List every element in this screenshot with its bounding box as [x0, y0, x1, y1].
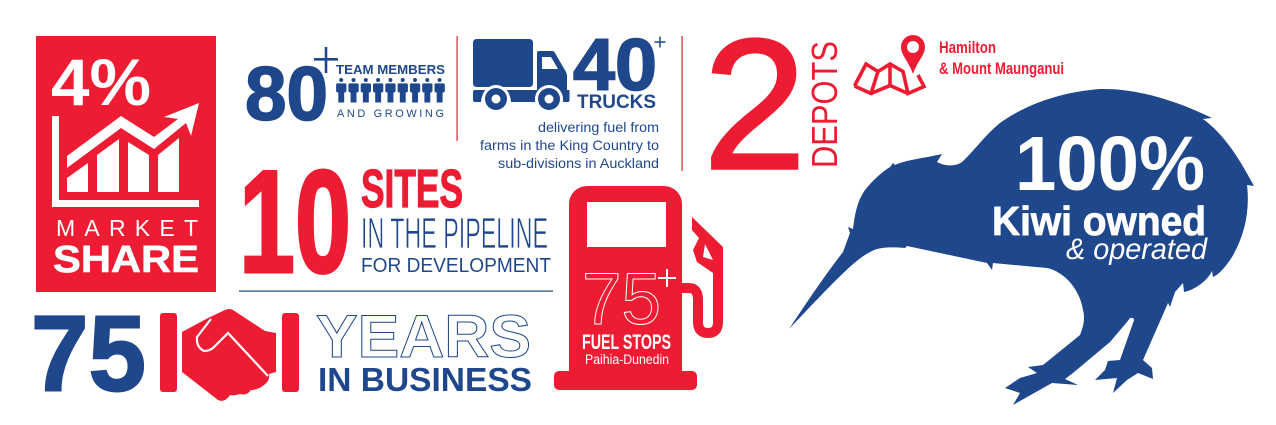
trucks description: sub-divisions in Auckland: [498, 155, 659, 171]
team members label: TEAM MEMBERS: [336, 63, 445, 77]
depot locations: [939, 38, 1064, 78]
depot locations: & Mount Maunganui: [939, 59, 1064, 78]
panel: years in business: [31, 292, 532, 414]
plus sign: [654, 36, 666, 48]
trucks label: TRUCKS: [577, 92, 656, 113]
depot locations: Hamilton: [939, 38, 996, 57]
trucks description: farms in the King Country to: [480, 137, 659, 153]
depot count: 2: [703, 2, 806, 208]
icon: map and pin: [854, 35, 925, 94]
panel: fuel stops: [554, 186, 723, 390]
icon: rising bar chart: [52, 103, 199, 207]
in the pipeline label: IN THE PIPELINE: [361, 209, 548, 258]
truck count: 40: [573, 25, 657, 106]
for development label: FOR DEVELOPMENT: [361, 255, 551, 277]
share label: SHARE: [53, 239, 199, 281]
market label: MARKET: [56, 215, 198, 241]
trucks description: delivering fuel from: [538, 119, 659, 135]
panel: sites in the pipeline: [239, 140, 551, 303]
plus sign: [658, 269, 676, 287]
and growing label: AND GROWING: [337, 108, 444, 120]
panel: kiwi owned: [789, 89, 1254, 405]
kiwi owned label: Kiwi owned: [992, 198, 1206, 244]
sites count: 10: [239, 140, 351, 303]
icon: row of people: [336, 78, 445, 103]
panel: trucks: [473, 25, 666, 171]
panel: depots: [703, 2, 1064, 208]
sites label: SITES: [361, 159, 463, 219]
depots label: DEPOTS: [804, 41, 845, 168]
plus sign: [314, 47, 338, 73]
panel: team members: [245, 47, 445, 137]
panel: market share: [36, 36, 216, 292]
trucks description: [480, 119, 659, 171]
fuel stops count: 75: [582, 259, 661, 340]
icon: handshake: [160, 309, 299, 401]
100 percent figure: 100%: [1015, 121, 1205, 207]
operated label: & operated: [1066, 233, 1208, 266]
years count: 75: [31, 292, 146, 414]
market share figure: 4%: [51, 45, 151, 119]
team count: 80: [245, 52, 328, 137]
icon: fuel pump: [554, 186, 723, 390]
in business label: IN BUSINESS: [318, 361, 532, 398]
route label: Paihia-Dunedin: [585, 352, 669, 367]
icon: kiwi silhouette: [789, 89, 1254, 405]
fuel stops label: FUEL STOPS: [582, 331, 671, 354]
years label: YEARS: [316, 303, 531, 370]
icon: truck: [473, 39, 570, 113]
